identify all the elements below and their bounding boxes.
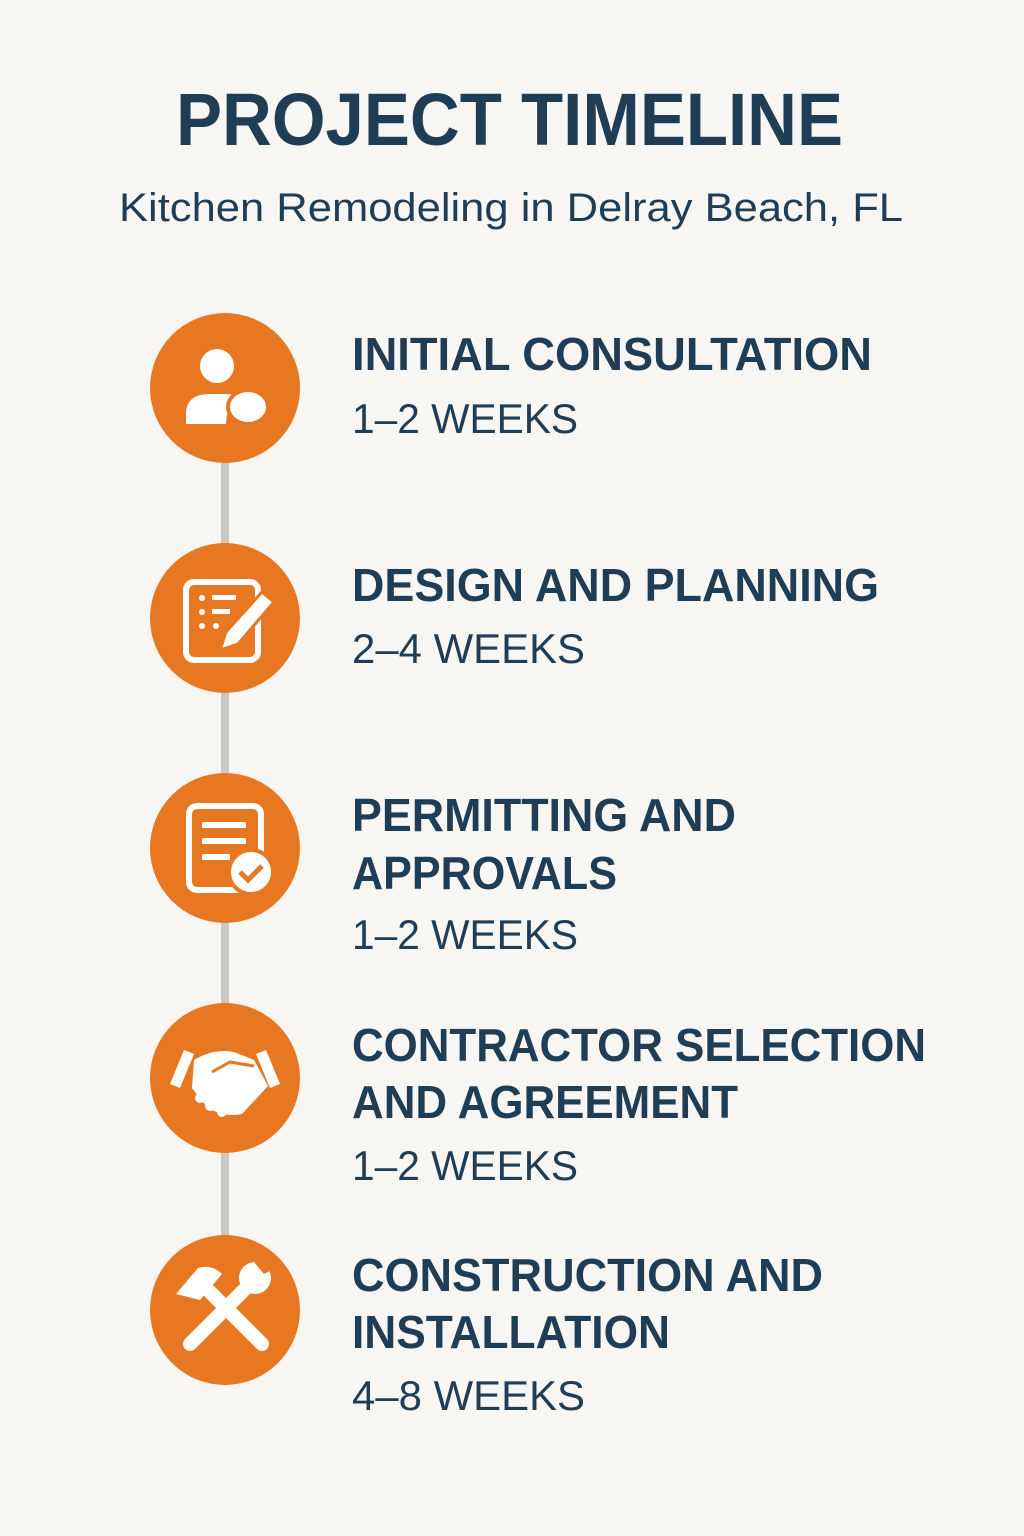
heading: PERMITTING AND	[352, 789, 736, 841]
title: PROJECT TIMELINE	[176, 78, 843, 161]
duration: 2–4 WEEKS	[352, 625, 585, 672]
step 1: initial consultation	[150, 313, 872, 463]
duration: 4–8 WEEKS	[352, 1372, 585, 1419]
icon: document check	[150, 773, 300, 923]
icon: design sketch	[150, 543, 300, 693]
duration: 1–2 WEEKS	[352, 1142, 578, 1189]
heading: DESIGN AND PLANNING	[352, 559, 879, 611]
step 4: contractor: AND AGREEMENT	[352, 1076, 738, 1128]
icon: handshake	[150, 1003, 300, 1153]
step 2: design and planning	[150, 543, 879, 693]
icon: hammer and wrench	[150, 1235, 300, 1385]
duration: 1–2 WEEKS	[352, 911, 578, 958]
icon: people	[150, 313, 300, 463]
heading: CONTRACTOR SELECTION	[352, 1019, 926, 1071]
heading: CONSTRUCTION AND	[352, 1249, 823, 1301]
step 5: construction: INSTALLATION	[352, 1306, 670, 1358]
duration: 1–2 WEEKS	[352, 395, 578, 442]
step 4: contractor	[150, 1003, 926, 1189]
subtitle: Kitchen Remodeling in Delray Beach, FL	[119, 186, 903, 230]
timeline connector line	[221, 388, 229, 1310]
step 3: permitting: APPROVALS	[352, 847, 617, 899]
heading: initial consultation: INITIAL CONSULTATION	[352, 328, 872, 380]
step 5: construction	[150, 1235, 823, 1419]
step 3: permitting	[150, 773, 736, 958]
